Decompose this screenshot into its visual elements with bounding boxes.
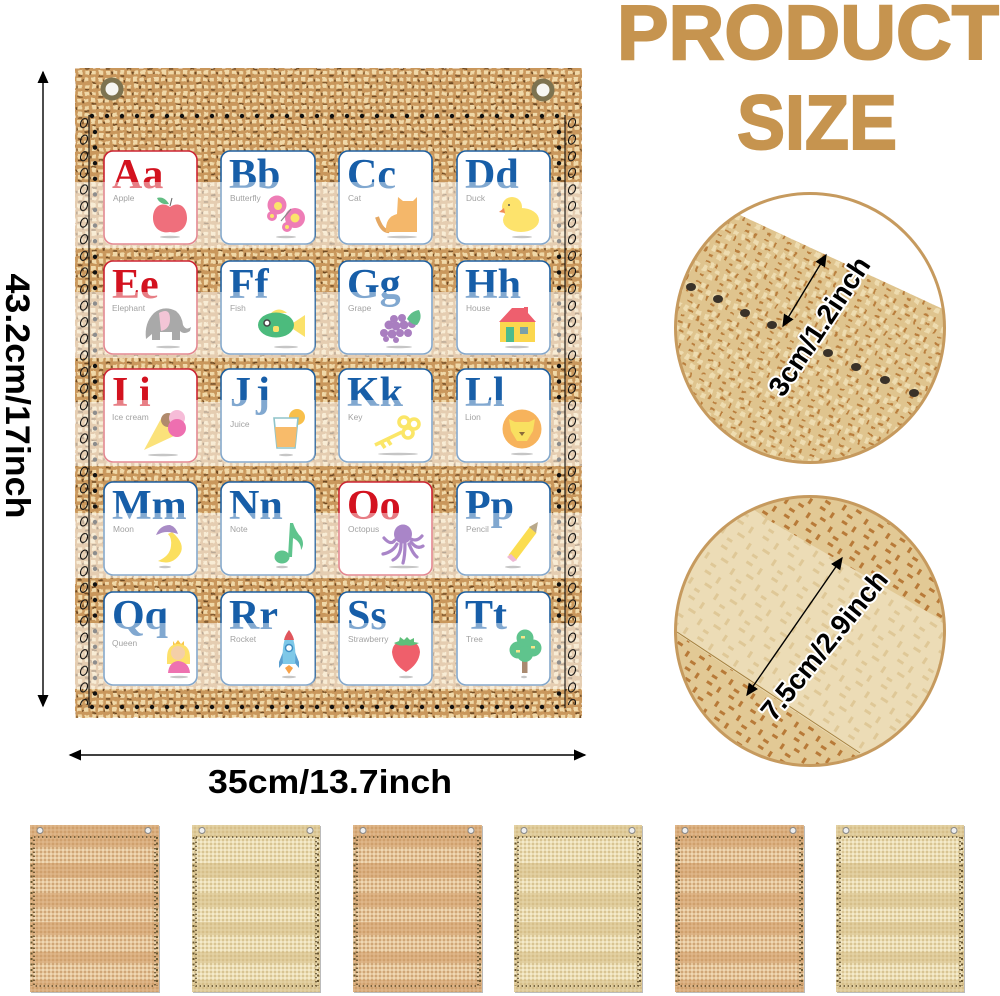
width dimension: arrow and label: 35cm/13.7inch — [208, 763, 452, 800]
card: Tt Tree — [456, 592, 551, 686]
card: Ss Strawberry: Strawberry — [348, 634, 389, 644]
card: Rr Rocket — [220, 592, 315, 686]
card: Bb Butterfly — [220, 151, 315, 245]
card: Rr Rocket: Rocket — [230, 634, 257, 644]
card: Aa Apple — [103, 151, 198, 245]
card: Pp Pencil: Pp — [465, 483, 514, 529]
doodle borders — [77, 115, 579, 708]
card: Cc Cat: Cc — [347, 152, 396, 198]
thumbnail: yellow burlap chart 3 — [836, 825, 965, 993]
title: product size: SIZE — [737, 80, 897, 166]
card: Ff Fish: Ff — [229, 262, 270, 308]
card: Oo Octopus: Octopus — [348, 524, 379, 534]
card: Ll Lion: Lion — [465, 412, 481, 422]
dotted border — [92, 116, 572, 707]
card: Ss Strawberry — [338, 592, 433, 686]
card: Hh House — [456, 261, 551, 355]
card: Dd Duck: Dd — [465, 152, 519, 198]
card: Ii Ice cream: I — [112, 370, 128, 416]
card: Nn Note: Nn — [229, 483, 283, 529]
card: Pp Pencil — [456, 482, 551, 576]
card: Oo Octopus: Oo — [347, 483, 401, 529]
thumbnail: orange burlap chart 1 — [30, 825, 160, 993]
card: Rr Rocket: Rr — [229, 593, 278, 639]
title: product size — [617, 0, 999, 166]
card: Gg Grape: Gg — [347, 262, 401, 308]
thumbnail: yellow burlap chart 1 — [192, 825, 321, 993]
card: Ee Elephant: Elephant — [112, 303, 146, 313]
card: Mm Moon: Mm — [112, 483, 187, 529]
card: Hh House: Hh — [465, 262, 521, 308]
card: Ff Fish — [220, 261, 315, 355]
panel: burlap pocket chart — [75, 68, 582, 718]
card: Tt Tree: Tree — [466, 634, 483, 644]
card: Tt Tree: Tt — [465, 593, 507, 639]
card: Pp Pencil: Pencil — [466, 524, 489, 534]
card: Jj Juice — [220, 369, 315, 463]
card: Bb Butterfly: Butterfly — [230, 193, 262, 203]
card: Nn Note — [220, 482, 315, 576]
card: Cc Cat — [338, 151, 433, 245]
card: Gg Grape: Grape — [348, 303, 372, 313]
thumbnail: yellow burlap chart 2 — [514, 825, 643, 993]
card: Qq Queen: Queen — [112, 638, 137, 648]
card: Ll Lion: Ll — [465, 370, 505, 416]
card: Jj Juice: J — [230, 370, 251, 416]
card: Aa Apple: Aa — [112, 152, 163, 198]
panel: detail circle, 7.5cm pocket: 7.5cm/2.9inch — [754, 564, 894, 726]
panel: detail circle, 3cm header: 3cm/1.2inch — [762, 251, 876, 402]
card: Ii Ice cream — [103, 369, 198, 463]
card: Dd Duck: Duck — [466, 193, 486, 203]
card: Kk Key: Kk — [347, 370, 404, 416]
card: Dd Duck — [456, 151, 551, 245]
card: Bb Butterfly: Bb — [229, 152, 280, 198]
grommets — [103, 80, 552, 99]
card: Kk Key — [338, 369, 433, 463]
card: Qq Queen — [103, 592, 198, 686]
card: Cc Cat: Cat — [348, 193, 362, 203]
card: Ee Elephant — [103, 261, 198, 355]
pocket bands — [75, 182, 582, 689]
thumbnail: orange burlap chart 3 — [675, 825, 805, 993]
card: Aa Apple: Apple — [113, 193, 135, 203]
card: Mm Moon: Moon — [113, 524, 134, 534]
card: Ii Ice cream: i — [139, 370, 151, 416]
card: Jj Juice: Juice — [230, 419, 250, 429]
card: Ee Elephant: Ee — [112, 262, 159, 308]
card: Ff Fish: Fish — [230, 303, 246, 313]
card: Gg Grape — [338, 261, 433, 355]
card: Jj Juice: j — [255, 370, 270, 416]
card: Qq Queen: Qq — [112, 593, 168, 639]
card: Ll Lion — [456, 369, 551, 463]
card: Oo Octopus — [338, 482, 433, 576]
card: Hh House: House — [466, 303, 491, 313]
panel: detail circle, 3cm header — [674, 192, 946, 464]
card: Mm Moon — [103, 482, 198, 576]
card: Kk Key: Key — [348, 412, 363, 422]
card: Ss Strawberry: Ss — [347, 593, 387, 639]
card: Ii Ice cream: Ice cream — [112, 412, 149, 422]
thumbnail: orange burlap chart 2 — [353, 825, 483, 993]
card: Nn Note: Note — [230, 524, 248, 534]
panel: detail circle, 7.5cm pocket — [674, 495, 946, 767]
